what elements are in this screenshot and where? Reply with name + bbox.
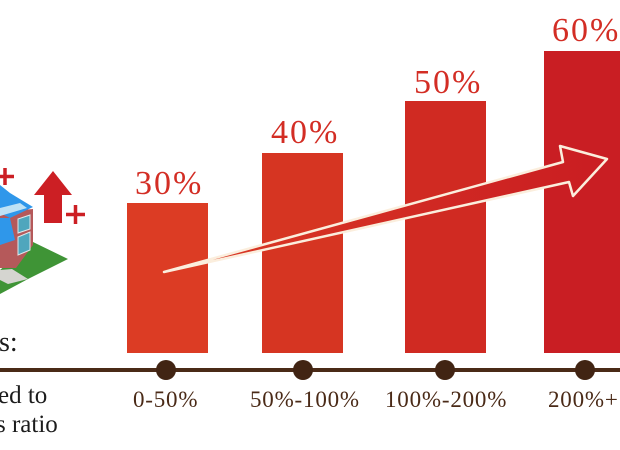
axis dot bbox=[575, 360, 595, 380]
icon: plus right bbox=[66, 205, 85, 224]
axis dot bbox=[293, 360, 313, 380]
brick walls bbox=[0, 209, 33, 268]
value: 60%: 60% bbox=[552, 12, 620, 49]
bar chart bbox=[127, 51, 620, 353]
axis dot bbox=[156, 360, 176, 380]
bar: 200%+ bbox=[544, 51, 620, 353]
icon: plus left bbox=[0, 168, 14, 185]
value: 50%: 50% bbox=[414, 64, 482, 101]
value: 30%: 30% bbox=[135, 165, 203, 202]
bar: 0-50% bbox=[127, 203, 208, 353]
windows bbox=[18, 215, 30, 233]
value: 40%: 40% bbox=[271, 114, 339, 151]
bar: 50%-100% bbox=[262, 153, 343, 353]
axis labels bbox=[133, 387, 619, 412]
axis dot bbox=[435, 360, 455, 380]
path bbox=[0, 269, 28, 284]
cropped left text bbox=[0, 327, 58, 438]
icon: building bbox=[0, 185, 68, 294]
value labels bbox=[135, 12, 620, 202]
blue roof bbox=[0, 185, 33, 218]
timeline axis bbox=[0, 360, 620, 380]
trend arrow bbox=[164, 146, 607, 272]
bar: 100%-200% bbox=[405, 101, 486, 353]
label: 200%+: 200%+ bbox=[548, 387, 619, 412]
lawn bbox=[0, 242, 68, 294]
label: 100%-200%: 100%-200% bbox=[385, 387, 507, 412]
icon: up arrow bbox=[34, 171, 72, 223]
label: 50%-100%: 50%-100% bbox=[250, 387, 360, 412]
label: 0-50%: 0-50% bbox=[133, 387, 198, 412]
